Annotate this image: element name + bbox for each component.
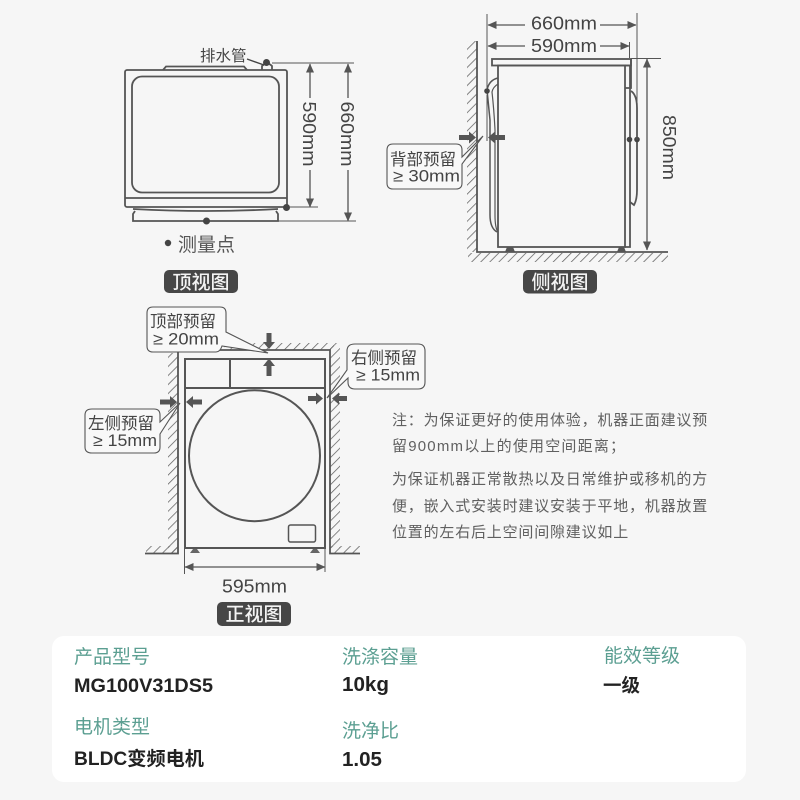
- spec: wash ratio: 1.05: [342, 749, 382, 771]
- callout: left clearance: ≥ 15mm: [93, 432, 157, 450]
- callout: left clearance: [85, 403, 180, 453]
- badge: top view: [164, 270, 238, 294]
- clearance arrows: [160, 333, 347, 408]
- spec: energy rating: [603, 645, 680, 696]
- spec: wash capacity: 10kg: [342, 674, 389, 696]
- dimension: 590mm: 590mm: [531, 36, 597, 56]
- spec: energy rating: 能效等级: [604, 645, 680, 667]
- text block: installation notes: 注：为保证更好的使用体验，机器正面建议预: [392, 412, 708, 429]
- callout: left clearance: 左侧预留: [88, 414, 154, 433]
- callout: top clearance: [147, 307, 268, 353]
- callout: right clearance: ≥ 15mm: [356, 366, 420, 384]
- clearance arrows: [459, 132, 505, 144]
- text block: installation notes: 便，嵌入式安装时建议安装于平地，机器放置: [392, 498, 708, 515]
- text block: installation notes: [392, 412, 708, 541]
- callout: right clearance: [327, 344, 425, 398]
- panel: specification table: [52, 636, 746, 782]
- spec: product model: MG100V31DS5: [74, 676, 213, 697]
- measurement dots: [203, 59, 290, 224]
- callout: top clearance: 顶部预留: [150, 312, 216, 331]
- washer front outline: [185, 359, 325, 548]
- text block: installation notes: 位置的左右后上空间间隙建议如上: [392, 524, 629, 541]
- dimension: 850mm: 850mm: [659, 115, 679, 180]
- dimension: 595mm: 595mm: [222, 576, 287, 596]
- text block: installation notes: 留900mm以上的使用空间距离；: [392, 438, 626, 455]
- badge: front view: 正视图: [225, 604, 283, 626]
- callout: right clearance: 右侧预留: [351, 348, 417, 368]
- spec: wash capacity: [342, 646, 418, 696]
- label: drain pipe: 排水管: [200, 47, 247, 65]
- panel: top view: [125, 47, 357, 294]
- spec: motor type: 电机类型: [74, 716, 150, 738]
- dimension: 660mm: 660mm: [337, 102, 357, 166]
- spec: wash capacity: 洗涤容量: [342, 646, 418, 668]
- callout: top clearance: ≥ 20mm: [153, 330, 219, 348]
- washer top outline: [125, 64, 287, 221]
- wall and floor hatching: [467, 41, 668, 262]
- badge: side view: [523, 270, 597, 294]
- dimension: 660mm: 660mm: [531, 14, 597, 34]
- spec: product model: 产品型号: [74, 646, 150, 668]
- badge: side view: 侧视图: [531, 272, 589, 294]
- spec: product model: [74, 646, 213, 697]
- spec: energy rating: 一级: [603, 675, 641, 696]
- panel: front view: [85, 307, 425, 626]
- feet: [190, 549, 320, 553]
- wall recess hatching: [145, 343, 360, 554]
- legend: measuring point: 测量点: [178, 234, 235, 256]
- callout: rear clearance: [387, 136, 483, 189]
- feet: [505, 247, 626, 252]
- badge: front view: [217, 602, 291, 626]
- spec: wash ratio: [342, 720, 399, 771]
- spec: motor type: [74, 716, 204, 770]
- badge: top view: 顶视图: [172, 272, 230, 294]
- measurement dots: [484, 88, 640, 142]
- panel: side view: [387, 13, 679, 294]
- callout: rear clearance: 背部预留: [390, 150, 456, 169]
- dimension: 590mm: 590mm: [299, 102, 319, 166]
- washer side outline: [487, 59, 637, 247]
- text block: installation notes: 为保证机器正常散热以及日常维护或移机的方: [392, 471, 708, 488]
- spec: motor type: BLDC变频电机: [74, 747, 204, 770]
- spec: wash ratio: 洗净比: [342, 720, 399, 742]
- callout: rear clearance: ≥ 30mm: [393, 168, 460, 186]
